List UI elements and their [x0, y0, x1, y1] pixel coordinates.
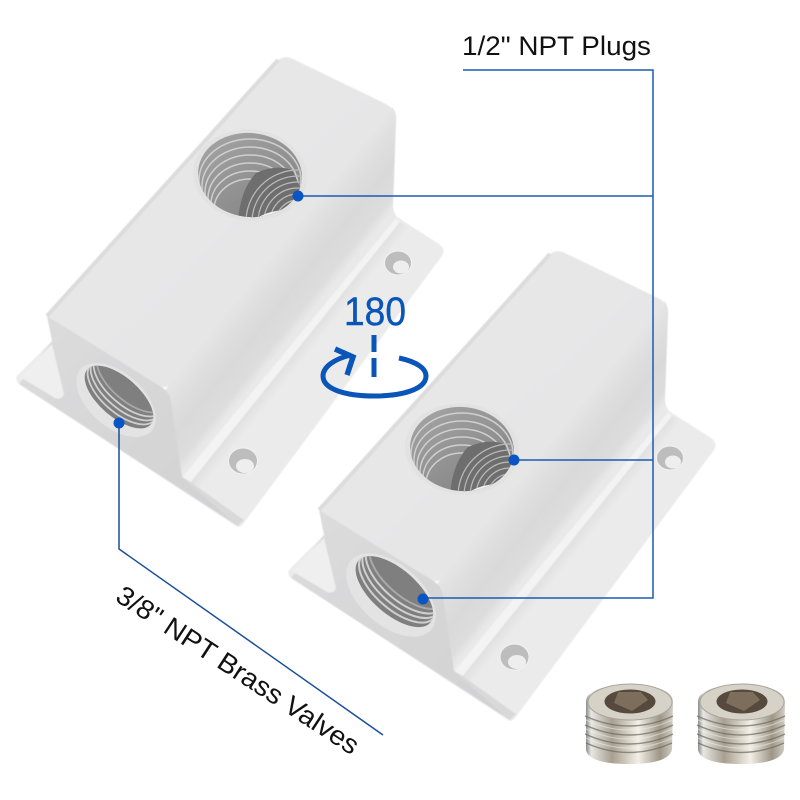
- callout lines: 1/2 inch NPT plugs: [298, 70, 653, 598]
- axis dashes: [372, 335, 376, 377]
- left block front face: [19, 316, 238, 526]
- label: 3/8 inch NPT brass valves: 3/8" NPT Brass Valves: [111, 580, 365, 761]
- left block flange tab: [20, 344, 64, 398]
- right block flange: [288, 411, 715, 721]
- right block flange end bevel: [454, 671, 516, 720]
- left block flange: [16, 217, 443, 527]
- left block mounting holes: [228, 251, 412, 474]
- rotation label: 180: [344, 290, 406, 334]
- right block front threaded port: [346, 554, 436, 636]
- left manifold block: [16, 57, 443, 527]
- rotation icon: 180 degrees: [323, 290, 426, 396]
- right block side face: [437, 301, 669, 671]
- brass plug left: [585, 684, 673, 764]
- right block mounting holes: [500, 446, 684, 670]
- brass plug right: [697, 684, 785, 764]
- right block front face: [291, 510, 510, 720]
- callout line: 3/8 inch NPT brass valves: [119, 423, 383, 735]
- left block upper threaded port: [198, 132, 302, 218]
- left block side face: [165, 107, 397, 477]
- right manifold block: [288, 251, 715, 721]
- label: 1/2 inch NPT plugs: 1/2" NPT Plugs: [462, 31, 651, 61]
- circular arrow: [323, 355, 426, 396]
- left block front threaded port: [76, 363, 156, 437]
- right block upper threaded port: [410, 406, 514, 492]
- left block flange end bevel: [182, 477, 244, 526]
- right block flange tab: [292, 538, 336, 592]
- right block top face: [319, 251, 664, 581]
- left block top face: [47, 57, 392, 387]
- callout marker dots: [114, 190, 520, 604]
